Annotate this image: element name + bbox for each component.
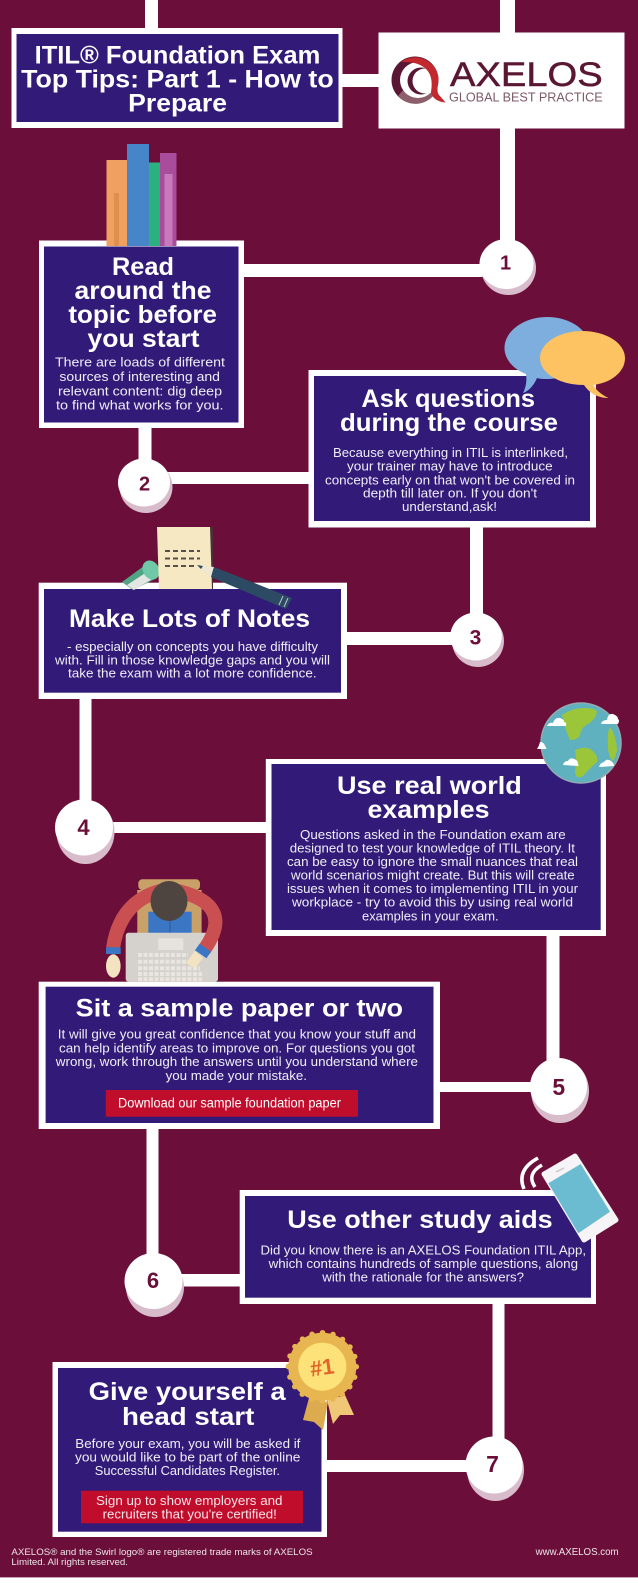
icon: number one rosette: #1	[308, 1353, 336, 1382]
heading: tip 4: Use real world	[337, 772, 522, 800]
heading: tip 1: around the	[74, 277, 212, 305]
step circle 6: 6	[147, 1268, 159, 1293]
icon: speech bubbles	[504, 317, 625, 398]
body text: tip 4: Questions asked in the Foundation exam are	[300, 827, 566, 842]
body text: tip 6: which contains hundreds of sample questions, along	[268, 1256, 578, 1271]
step circle 4: 4	[77, 815, 90, 840]
body text: tip 2: Because everything in ITIL is interlinked,	[333, 445, 568, 460]
body text: tip 7	[75, 1436, 301, 1478]
body text: tip 3	[54, 639, 330, 680]
title text	[21, 41, 334, 118]
heading: tip 2: Ask questions	[361, 385, 535, 413]
body text: tip 7: Successful Candidates Register.	[95, 1463, 280, 1478]
body text: tip 2: depth till later on. If you don't	[363, 486, 537, 500]
heading: tip 2	[340, 385, 558, 437]
body text: tip 4: issues when it comes to implementing ITIL in your	[287, 881, 579, 896]
panel: tip 1 read around the topic	[39, 240, 244, 428]
body text: tip 4: can be easy to ignore the small nuances that real	[287, 854, 578, 869]
body text: tip 3: take the exam with a lot more confidence.	[68, 666, 317, 680]
body text: tip 7: you would like to be part of the online	[75, 1450, 300, 1464]
panel: tip 6 use other study aids	[240, 1190, 596, 1304]
icon: books	[106, 144, 176, 246]
step circle 7	[466, 1436, 524, 1501]
step circle 1: 1	[500, 252, 511, 274]
step circle 2: 2	[139, 474, 150, 496]
footer: trademark notice: AXELOS® and the Swirl logo® are registered trade marks of AXELOS	[11, 1547, 313, 1558]
heading: tip 1: you start	[88, 325, 200, 353]
heading: tip 3: Make Lots of Notes	[69, 605, 310, 633]
logo wordmark: AXELOS	[450, 56, 603, 94]
heading: tip 1	[68, 253, 217, 353]
heading: tip 1: topic before	[68, 301, 217, 329]
footer: website: www.AXELOS.com	[535, 1547, 619, 1558]
body text: tip 1: There are loads of different	[55, 354, 225, 370]
icon: notepad, highlighter and pencil	[122, 527, 292, 609]
icon: smartphone with signal arcs	[522, 1156, 616, 1240]
icon: swirl logo	[392, 56, 446, 104]
body text: tip 1: to find what works for you.	[56, 398, 224, 412]
body text: tip 4	[287, 827, 579, 924]
heading: tip 4	[337, 772, 522, 824]
step circle 5	[530, 1058, 589, 1123]
panel: tip 5 sit a sample paper	[39, 982, 440, 1129]
step circle 3	[450, 612, 504, 667]
body text: tip 5: can help identify areas to improve on. For questions you got	[59, 1040, 415, 1056]
body text: tip 2: understand,ask!	[402, 499, 497, 514]
body text: tip 3: - especially on concepts you have difficulty	[67, 639, 319, 654]
body text: tip 3: with. Fill in those knowledge gaps and you will	[54, 652, 330, 668]
AXELOS logo	[378, 32, 624, 128]
heading: tip 7: head start	[122, 1403, 255, 1431]
body text: tip 1	[55, 354, 225, 412]
title text: Prepare	[128, 90, 227, 118]
step circle 7: 7	[486, 1451, 499, 1477]
body text: tip 7: Before your exam, you will be asked if	[75, 1436, 301, 1451]
step circle 2	[118, 458, 172, 513]
body text: tip 4: examples in your exam.	[362, 908, 499, 924]
button: download sample paper: Download our sample foundation paper	[118, 1096, 341, 1110]
footer: trademark notice: Limited. All rights reserved.	[11, 1557, 128, 1568]
body text: tip 5: wrong, work through the answers until you understand where	[55, 1054, 418, 1069]
step circle 4	[55, 800, 114, 864]
step circle 1	[480, 239, 536, 295]
body text: tip 4: world scenarios might create. But this will create	[290, 868, 575, 882]
heading: tip 2: during the course	[340, 409, 558, 437]
logo tagline: GLOBAL BEST PRACTICE	[449, 91, 603, 105]
heading: tip 7: Give yourself a	[89, 1378, 287, 1406]
heading: tip 1: Read	[112, 253, 174, 281]
footer: trademark notice	[11, 1547, 313, 1568]
connector lines	[80, 0, 560, 1472]
body text: tip 2: concepts early on that won't be covered in	[325, 472, 575, 488]
panel: tip 4 use real world examples	[266, 759, 606, 936]
body text: tip 5: It will give you great confidence that you know your stuff and	[58, 1026, 416, 1042]
panel: tip 2 ask questions	[308, 370, 596, 528]
heading: tip 4: examples	[368, 796, 490, 824]
button: sign up: Sign up to show employers and	[96, 1493, 282, 1508]
step circle 6	[124, 1253, 184, 1317]
step circle 5: 5	[552, 1074, 565, 1100]
heading: tip 6: Use other study aids	[287, 1206, 553, 1234]
panel: tip 7 give yourself a head start	[52, 1362, 327, 1537]
body text: tip 6: with the rationale for the answers?	[321, 1270, 524, 1284]
title text: Top Tips: Part 1 - How to	[21, 66, 334, 94]
body text: tip 4: designed to test your knowledge of ITIL theory. It	[290, 840, 575, 856]
button: sign up	[81, 1491, 303, 1523]
body text: tip 5	[55, 1026, 418, 1083]
title panel	[12, 28, 342, 128]
body text: tip 5: you made your mistake.	[166, 1068, 307, 1083]
body text: tip 4: workplace - try to avoid this by using real world	[291, 894, 573, 910]
panel: tip 3 make lots of notes	[39, 583, 347, 699]
button: download sample paper	[106, 1090, 358, 1117]
icon: globe	[537, 703, 621, 783]
body text: tip 6	[260, 1242, 586, 1284]
body text: tip 2	[325, 445, 575, 514]
heading: tip 7	[89, 1378, 287, 1431]
body text: tip 1: relevant content: dig deep	[58, 384, 222, 398]
icon: number one rosette	[288, 1333, 356, 1430]
step circle 3: 3	[470, 626, 481, 650]
body text: tip 1: sources of interesting and	[59, 369, 220, 384]
button: sign up: recruiters that you're certified!	[103, 1506, 277, 1522]
heading: tip 5: Sit a sample paper or two	[76, 995, 403, 1023]
body text: tip 2: your trainer may have to introduce	[347, 458, 553, 474]
icon: person at laptop from above	[106, 879, 218, 982]
body text: tip 6: Did you know there is an AXELOS Foundation ITIL App,	[260, 1242, 586, 1258]
title text: ITIL® Foundation Exam	[35, 41, 320, 69]
